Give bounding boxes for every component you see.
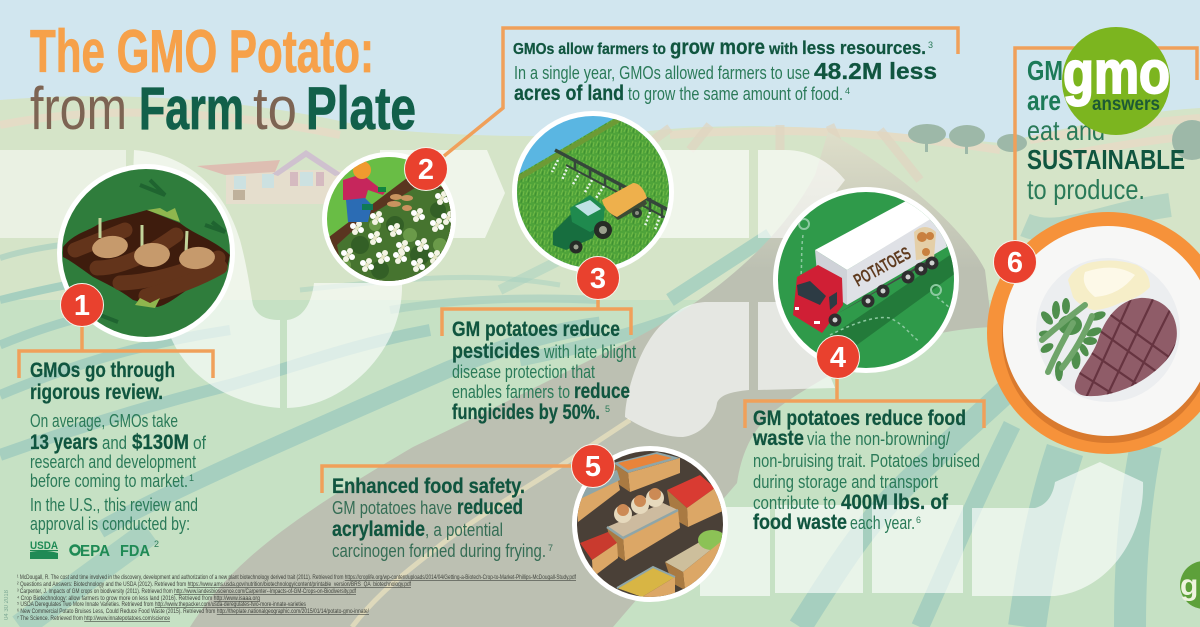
title: to	[253, 75, 297, 142]
panel 1: review callout: On average, GMOs take	[30, 411, 178, 431]
logo: gmo answers	[1062, 27, 1170, 135]
panel 2: fewer resources callout: to grow the same amount of food.	[628, 84, 843, 104]
road	[190, 132, 992, 627]
number badge 2	[404, 148, 448, 190]
number badge 1	[60, 284, 104, 326]
number badge 5: 5	[585, 451, 601, 483]
panel 5: food safety callout: Enhanced food safety.	[332, 475, 525, 498]
number badge 3: 3	[590, 263, 606, 295]
panel 2: fewer resources callout: GMOs allow farmers to	[513, 41, 666, 58]
panel 3: pesticides callout	[442, 298, 636, 424]
footnotes	[17, 575, 576, 622]
panel 1: review callout: approval is conducted by:	[30, 514, 190, 534]
panel 1: review callout: research and development	[30, 452, 196, 472]
number badge 4	[816, 336, 860, 378]
panel 4: food waste callout: contribute to	[753, 493, 836, 513]
panel 3: pesticides callout: GM potatoes reduce	[452, 318, 620, 341]
panel 1: review callout: and	[102, 433, 127, 453]
image 4: potato truck	[773, 187, 960, 373]
green beans	[1039, 298, 1107, 381]
panel 4: food waste callout: 6	[916, 515, 921, 525]
steak	[1074, 298, 1177, 396]
number badge 6: 6	[1007, 247, 1023, 279]
panel 2: fewer resources callout	[444, 28, 958, 156]
agency logos: FDA	[120, 543, 150, 560]
house	[197, 150, 342, 204]
title: Farm	[139, 75, 244, 142]
number badge 6	[994, 240, 1036, 284]
panel 1: review callout: In the U.S., this review and	[30, 495, 198, 515]
field stripes	[0, 205, 1170, 627]
title: The GMO Potato:	[30, 18, 374, 85]
panel 4: food waste callout: food waste	[753, 511, 847, 534]
logo: gmo answers: answers	[1092, 94, 1160, 115]
panel 2: fewer resources callout: grow more	[670, 36, 765, 59]
panel 1: review callout: rigorous review.	[30, 381, 163, 404]
footnotes: ⁴ Crop Biotechnology: allow farmers to grow more on less land (2016). Retrieved from http://www.isaaa.org	[17, 595, 260, 602]
title: from	[30, 75, 127, 142]
image 2: farmer and potato plants	[322, 152, 456, 290]
panel 5: food safety callout: acrylamide	[332, 518, 425, 541]
agency logos	[30, 539, 159, 560]
translucent giant letter shapes	[0, 150, 1143, 596]
panel 4: food waste callout: GM potatoes reduce food	[753, 407, 966, 430]
panel 2: fewer resources callout: with	[768, 41, 798, 58]
agency logos: 2	[154, 539, 159, 549]
panel 6: safe and sustainable callout: GM	[1027, 55, 1063, 86]
text on truck: POTATOES	[850, 243, 914, 290]
image 6: dinner plate	[987, 212, 1200, 454]
mashed potato	[1068, 261, 1150, 310]
panel 5: food safety callout: reduced	[457, 496, 523, 519]
panel 5: food safety callout: 7	[548, 543, 553, 553]
panel 5: food safety callout: carcinogen formed during frying.	[332, 541, 546, 561]
number badge 1: 1	[74, 290, 90, 322]
panel 3: pesticides callout: enables farmers to	[452, 382, 570, 402]
number badge 2: 2	[418, 154, 434, 186]
agency logos: EPA	[80, 543, 110, 560]
footnotes: ⁶ New Commercial Potato Bruises Less, Could Reduce Food Waste (2015). Retrieved from http://theplate.nationalgeographic.com/2015/01/14/potato-gmo-innate/	[17, 608, 369, 615]
footnotes: ⁷ The Science. Retrieved from http://www.innatepotatoes.com/science	[17, 615, 171, 622]
image 3: tractor spraying field	[512, 110, 680, 275]
panel 6: safe and sustainable callout: to produce.	[1027, 174, 1145, 205]
panel 5: food safety callout: , a potential	[425, 520, 503, 540]
panel 4: food waste callout: waste	[752, 427, 804, 450]
panel 2: fewer resources callout: 48.2M less	[814, 58, 937, 84]
date code: 04 30 2018	[4, 589, 10, 620]
footnotes: ¹ McDougall, R. The cost and time involved in the discovery, development and authorization of a new plant biotechnology derived trait (2011). Retrieved from https://croplife.org/wp-content/uploads/2014/04/Getting-a-Biotech-Crop-to-Market-Phillips-McDougall-Study.pdf	[17, 575, 576, 581]
footnotes: ⁵ USDA Deregulates Two More Innate Varieties. Retrieved from http://www.thepacker.com/usda-deregulates-two-more-innate-varieties	[17, 601, 306, 608]
panel 6: safe and sustainable callout	[1015, 48, 1197, 245]
panel 1: review callout: 1	[189, 473, 194, 483]
title: Plate	[306, 75, 416, 142]
logo: gmo answers: gmo	[1063, 39, 1170, 106]
panel 1: review callout: $130M	[132, 431, 189, 454]
image 1: potatoes in soil	[57, 164, 235, 342]
farmer	[343, 161, 386, 222]
number badge 4: 4	[830, 342, 846, 374]
panel 1: review callout: GMOs go through	[30, 359, 175, 382]
footnotes: ³ Carpenter, J. Impacts of GM crops on biodiversity (2011). Retrieved from http://www.landesbioscience.com/Carpenter--Impacts-of-GM-Crops-on-Biodiversity.pdf	[17, 589, 356, 595]
panel 4: food waste callout	[745, 370, 984, 534]
panel 4: food waste callout: non-bruising trait. Potatoes bruised	[753, 451, 980, 471]
panel 3: pesticides callout: 5	[605, 404, 610, 414]
trees	[908, 120, 1200, 160]
panel 1: review callout: before coming to market.	[30, 471, 188, 491]
panel 3: pesticides callout: reduce	[574, 380, 630, 403]
panel 3: pesticides callout: disease protection that	[452, 362, 595, 382]
panel 2: fewer resources callout: In a single year, GMOs allowed farmers to use	[514, 63, 810, 83]
panel 2: fewer resources callout: 4	[845, 86, 850, 96]
panel 1: review callout: of	[193, 433, 207, 453]
panel 4: food waste callout: each year.	[850, 513, 915, 533]
corner logo	[1180, 561, 1200, 609]
panel 5: food safety callout	[322, 466, 575, 561]
agency logos: USDA	[30, 540, 58, 552]
panel 4: food waste callout: 400M lbs. of	[841, 491, 949, 514]
panel 5: food safety callout: GM potatoes have	[332, 498, 452, 518]
panel 4: food waste callout: via the non-browning/	[807, 429, 950, 449]
panel 4: food waste callout: during storage and transport	[753, 472, 938, 492]
number badge 5	[572, 444, 614, 488]
panel 1: review callout: 13 years	[30, 431, 98, 454]
number badge 3	[576, 256, 620, 300]
image 5: market food crates	[572, 445, 728, 610]
footnotes: ² Questions and Answers: Biotechnology and the USDA (2012). Retrieved from https://www.ams.usda.gov/nutrition/biotechnology/content/printable_version/BRS_QA_biotechnology.pdf	[17, 582, 411, 588]
title	[30, 18, 416, 142]
panel 6: safe and sustainable callout: eat and	[1027, 115, 1105, 146]
panel 2: fewer resources callout: 3	[928, 40, 933, 50]
panel 6: safe and sustainable callout: are	[1027, 85, 1061, 116]
panel 1: review callout	[19, 325, 213, 560]
panel 3: pesticides callout: with late blight	[543, 342, 636, 362]
potato sack	[914, 227, 936, 260]
panel 3: pesticides callout: fungicides by 50%.	[452, 401, 600, 424]
panel 3: pesticides callout: pesticides	[452, 340, 540, 363]
panel 2: fewer resources callout: less resources.	[802, 38, 926, 58]
panel 2: fewer resources callout: acres of land	[514, 82, 624, 105]
